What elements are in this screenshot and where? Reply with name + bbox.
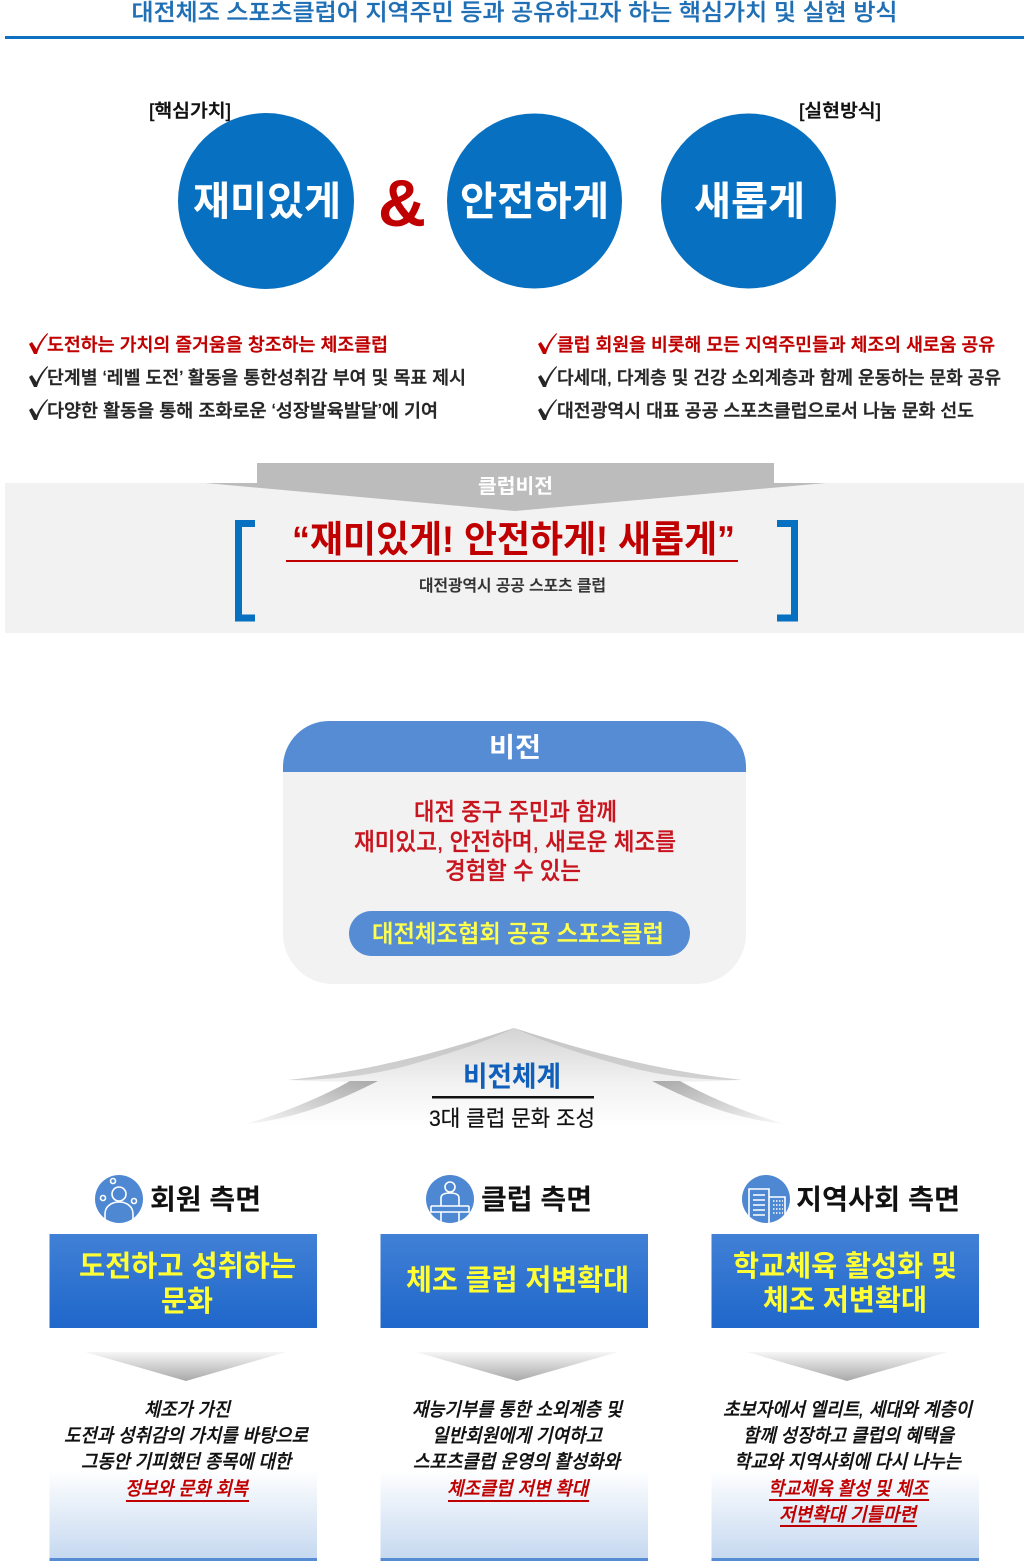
panel: club detail: 재능기부를 통한 소외계층 및: [412, 1400, 624, 1421]
box: challenge culture: 문화: [161, 1285, 213, 1318]
box: expand gymnastics club base: 체조 클럽 저변확대: [406, 1264, 629, 1297]
panel: member detail: 도전과 성취감의 가치를 바탕으로: [64, 1426, 309, 1447]
icon: people: [95, 1175, 143, 1223]
checklist: right: 대전광역시 대표 공공 스포츠클럽으로서 나눔 문화 선도: [557, 401, 974, 421]
panel: community detail: 함께 성장하고 클럽의 혜택을: [743, 1426, 955, 1447]
slogan: “재미있게! 안전하게! 새롭게”: [292, 519, 735, 560]
arrow: down: [747, 1352, 948, 1381]
vision pill: 대전체조협회 공공 스포츠클럽: [372, 921, 664, 948]
panel: club detail: 일반회원에게 기여하고: [432, 1426, 603, 1447]
subtitle: 대전광역시 공공 스포츠 클럽: [419, 577, 606, 595]
box: school sports: [712, 1234, 979, 1328]
checklist: right: 다세대, 다계층 및 건강 소외계층과 함께 운동하는 문화 공유: [557, 368, 1001, 388]
circle: fun: [178, 113, 354, 289]
arrow: down to club vision: [205, 463, 826, 511]
vision heading: 비전: [489, 733, 541, 763]
checklist: left: 단계별 ‘레벨 도전’ 활동을 통한성취감 부여 및 목표 제시: [47, 368, 466, 388]
panel: member detail: 정보와 문화 회복: [125, 1479, 249, 1500]
box: expand gymnastics club base: [380, 1234, 648, 1328]
box: challenge culture: 도전하고 성취하는: [79, 1250, 296, 1283]
column: club: [380, 1175, 648, 1561]
column: member: [50, 1175, 317, 1561]
checklist: right: [538, 333, 1001, 421]
arrow: down: [85, 1352, 286, 1381]
panel: member detail: 체조가 가진: [144, 1400, 232, 1421]
panel: club vision: [5, 463, 1024, 633]
icon: presenter: [426, 1175, 474, 1223]
checklist: left: 다양한 활동을 통해 조화로운 ‘성장발육발달’에 기여: [47, 401, 438, 421]
vision pill: [349, 911, 690, 956]
circle: safe: 안전하게: [460, 180, 609, 224]
checklist: left: 도전하는 가치의 즐거움을 창조하는 체조클럽: [47, 335, 388, 355]
heading: vision system: 비전체계: [463, 1061, 561, 1092]
label: practice method: [실현방식]: [799, 101, 881, 121]
label: core values: [핵심가치]: [149, 101, 231, 121]
panel: member detail: 그동안 기피했던 종목에 대한: [81, 1452, 293, 1473]
vision statement: [354, 799, 676, 885]
box: challenge culture: [50, 1234, 317, 1328]
heading: vision system: 3대 클럽 문화 조성: [429, 1106, 595, 1131]
arrow: down: [416, 1352, 618, 1381]
ampersand: &: [378, 166, 426, 240]
box: school sports: 학교체육 활성화 및: [733, 1250, 957, 1283]
roof arrow: vision system: [246, 1028, 784, 1126]
checklist: left: [29, 333, 466, 421]
panel: community detail: 저변확대 기틀마련: [779, 1505, 918, 1526]
vision statement: 재미있고, 안전하며, 새로운 체조를: [354, 829, 676, 856]
left bracket: [238, 524, 255, 618]
circle: fun: 재미있게: [193, 180, 341, 224]
vision statement: 대전 중구 주민과 함께: [414, 799, 617, 826]
panel: club detail: 체조클럽 저변 확대: [447, 1479, 590, 1500]
panel: community detail: 학교체육 활성 및 체조: [768, 1479, 929, 1500]
checklist: right: 클럽 회원을 비롯해 모든 지역주민들과 체조의 새로움 공유: [557, 335, 995, 355]
panel: community detail: 학교와 지역사회에 다시 나누는: [734, 1452, 962, 1473]
right bracket: [777, 524, 794, 618]
column: community: [712, 1175, 979, 1561]
panel: member detail: [50, 1400, 317, 1561]
panel: vision: [283, 721, 746, 984]
heading: member: 회원 측면: [150, 1184, 261, 1215]
circle: safe: [447, 114, 622, 288]
panel: club detail: 스포츠클럽 운영의 활성화와: [413, 1452, 622, 1473]
circle: new: [661, 114, 836, 288]
vision statement: 경험할 수 있는: [445, 858, 581, 885]
heading: community: 지역사회 측면: [796, 1184, 960, 1215]
box: school sports: 체조 저변확대: [763, 1284, 927, 1317]
circle: new: 새롭게: [694, 180, 805, 224]
icon: buildings: [742, 1175, 790, 1223]
vision header: [283, 721, 746, 772]
heading: club vision: 클럽비전: [478, 475, 553, 498]
heading: vision system: [429, 1061, 595, 1131]
panel: community detail: 초보자에서 엘리트, 세대와 계층이: [723, 1400, 974, 1421]
panel: club detail: [380, 1400, 648, 1561]
title: [5, 0, 1024, 39]
heading: club: 클럽 측면: [481, 1184, 592, 1215]
panel: community detail: [712, 1400, 979, 1561]
